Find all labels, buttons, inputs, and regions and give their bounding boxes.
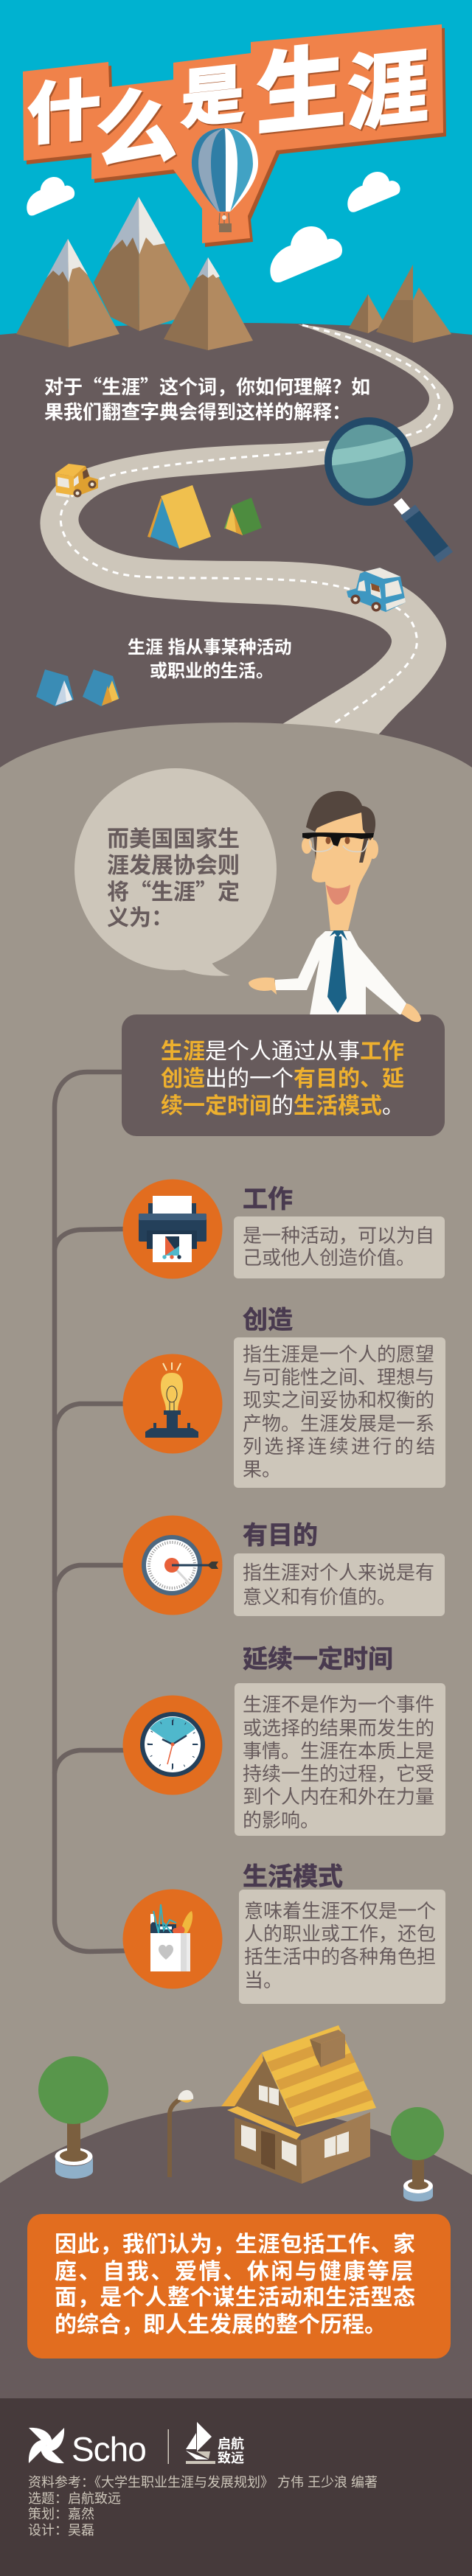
title banner: 么 (96, 80, 177, 179)
callout: career definition (122, 1014, 445, 1136)
text box: purposeful: 意义和有价值的。 (243, 1586, 396, 1608)
speech bubble: 义为： (107, 899, 173, 932)
text box: lifestyle: 人的职业或工作，还包 (244, 1919, 436, 1946)
icon: yellow tent (148, 485, 211, 549)
text box: work (234, 1216, 445, 1278)
speech bubble: 将“生涯”定 (107, 874, 240, 906)
text box: create: 产物。生涯发展是一系 (243, 1413, 434, 1435)
definition text on road: 或职业的生活。 (150, 661, 274, 681)
definition text on road (128, 638, 292, 681)
text box: duration: 持续一生的过程，它受 (243, 1759, 434, 1786)
text box: duration: 事情。生涯在本质上是 (243, 1740, 434, 1762)
title banner: 什 (27, 72, 101, 153)
title banner: 生 (256, 36, 346, 146)
logo: Qihang Zhiyuan (186, 2422, 244, 2465)
sky background (0, 0, 472, 347)
icon: left potted tree (38, 2056, 108, 2179)
speech bubble: 涯发展协会则 (107, 854, 240, 878)
definition text on road: 生涯 指从事某种活动 (128, 638, 292, 658)
logo: Qihang Zhiyuan: 致远 (218, 2451, 244, 2465)
text box: create: 与可能性之间、理想与 (243, 1366, 434, 1388)
mountains: right group (349, 265, 451, 343)
credits: 资料参考：《大学生职业生涯与发展规划》 方伟 王少浪 编著 (28, 2472, 378, 2491)
icon: house (221, 2025, 376, 2184)
speech bubble (74, 768, 277, 976)
hill (0, 2106, 472, 2403)
logo: Qihang Zhiyuan: 启航 (218, 2436, 244, 2451)
text box: duration: 的影响。 (243, 1809, 319, 1831)
heading: purposeful: 有目的 (243, 1522, 318, 1550)
text box: duration: 或选择的结果而发生的 (243, 1717, 434, 1739)
icon: blue tents (36, 669, 119, 706)
logo: Scho (29, 2428, 146, 2468)
icon: green tent (224, 498, 262, 535)
item: create (122, 1306, 445, 1488)
text box: work: 己或他人创造价值。 (243, 1247, 415, 1269)
callout: career definition: 生涯是个人通过从事工作 (161, 1040, 404, 1064)
text box: lifestyle: 当。 (244, 1969, 282, 1991)
icon: printer (122, 1180, 223, 1278)
credits: 设计：吴磊 (28, 2520, 94, 2539)
icon: right potted tree (391, 2107, 444, 2201)
text box: purposeful: 指生涯对个人来说是有 (243, 1562, 434, 1584)
heading: duration: 延续一定时间 (243, 1646, 393, 1674)
text box: lifestyle: 括生活中的各种角色担 (244, 1946, 436, 1968)
title banner (23, 24, 446, 247)
callout: conclusion (27, 2214, 451, 2359)
icon: target with arrow (122, 1516, 223, 1615)
title banner: 是 (181, 60, 243, 136)
icon: hot air balloon (192, 128, 258, 232)
intro text (44, 372, 370, 425)
text box: create: 果。 (243, 1458, 281, 1480)
callout: career definition: 续一定时间的生活模式。 (161, 1094, 404, 1118)
text box: create: 现实之间妥协和权衡的 (243, 1389, 434, 1411)
character: right hand (401, 1003, 421, 1022)
icon: shopping bag (122, 1889, 223, 1989)
text box: duration: 生涯不是作为一个事件 (243, 1693, 434, 1716)
logo: Scho: Scho (72, 2430, 146, 2468)
icon: yellow car (55, 464, 98, 498)
callout: conclusion: 庭、自我、爱情、休闲与健康等层 (55, 2260, 415, 2284)
text box: lifestyle (239, 1890, 445, 2004)
timeline connector (55, 1072, 125, 1952)
icon: light bulb (122, 1354, 223, 1454)
text box: purposeful (234, 1553, 445, 1616)
callout: conclusion: 的综合，即人生发展的整个历程。 (55, 2306, 386, 2339)
callout: conclusion: 因此，我们认为，生涯包括工作、家 (55, 2226, 416, 2258)
credits (28, 2472, 378, 2539)
text box: lifestyle: 意味着生涯不仅是一个 (244, 1900, 436, 1922)
clouds (27, 172, 400, 282)
callout: career definition: 创造出的一个有目的、延 (161, 1067, 404, 1091)
text box: create (234, 1337, 445, 1488)
icon: blue car (347, 568, 406, 612)
text box: create: 指生涯是一个人的愿望 (243, 1343, 434, 1365)
credits: 选题：启航致远 (28, 2488, 121, 2507)
credits: 策划：嘉然 (28, 2504, 94, 2523)
item: work (122, 1180, 445, 1278)
heading: lifestyle: 生活模式 (243, 1863, 343, 1891)
text box: duration: 到个人内在和外在力量 (243, 1786, 434, 1808)
item: duration (122, 1646, 445, 1836)
icon: clock (122, 1696, 223, 1795)
title banner: 涯 (347, 41, 428, 141)
text box: create: 列选择连续进行的结 (243, 1435, 438, 1458)
callout: conclusion: 面，是个人整个谋生活动和生活型态 (55, 2279, 416, 2311)
intro text: 对于“生涯”这个词，你如何理解？如 (44, 372, 370, 400)
speech bubble: 而美国国家生 (107, 827, 240, 852)
heading: create: 创造 (243, 1306, 293, 1334)
text box: duration (235, 1683, 445, 1836)
icon: magnifying glass (324, 417, 445, 557)
character: man with glasses (249, 791, 406, 1015)
heading: work: 工作 (243, 1186, 293, 1214)
icon: street lamp (170, 2090, 193, 2177)
intro text: 果我们翻查字典会得到这样的解释： (44, 397, 351, 425)
footer background (0, 2398, 472, 2576)
item: lifestyle (122, 1863, 445, 2004)
item: purposeful (122, 1516, 445, 1616)
winding road (40, 324, 454, 737)
text box: work: 是一种活动，可以为自 (243, 1221, 434, 1248)
panel: taupe definition area (0, 723, 472, 2204)
divider (168, 2429, 169, 2464)
mountains: left group (16, 197, 253, 350)
